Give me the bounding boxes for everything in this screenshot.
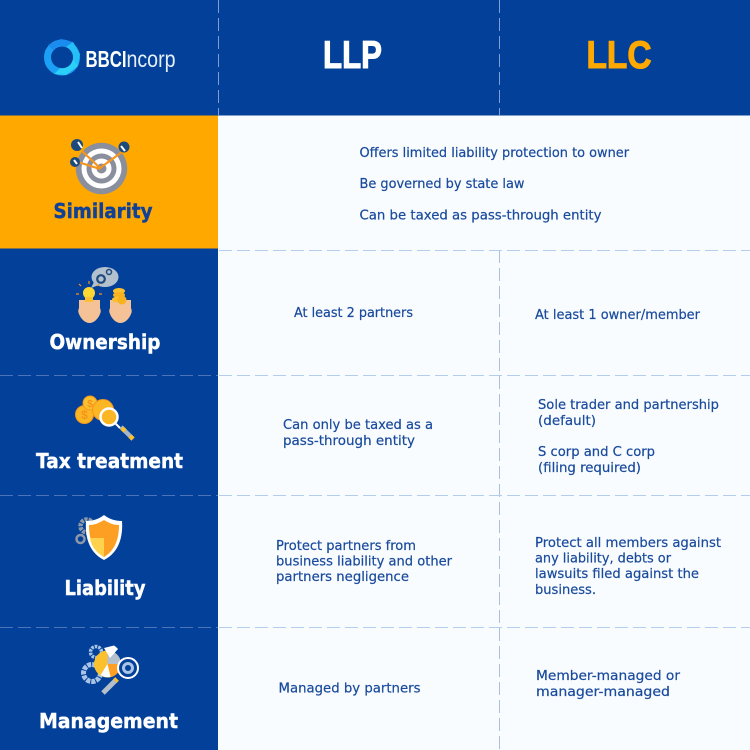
LLP ownership: At least 2 partners [294, 306, 413, 321]
LLP liability: business liability and other [276, 554, 453, 570]
LLC tax treatment [538, 398, 719, 476]
LLC tax treatment: (filing required) [538, 461, 641, 476]
similarity text [360, 146, 630, 224]
LLC management [536, 669, 681, 700]
column heading: LLP: LLP [323, 34, 382, 77]
logo: BBCIncorp: ncorp [126, 46, 176, 72]
similarity text: Offers limited liability protection to owner [360, 146, 630, 161]
LLC ownership: At least 1 owner/member [535, 308, 701, 323]
LLP tax treatment: pass-through entity [283, 434, 415, 449]
LLC tax treatment: (default) [538, 414, 596, 429]
LLP liability: Protect partners from [276, 539, 416, 554]
icon: two heads with idea and coins [76, 267, 132, 323]
logo: BBCIncorp [45, 39, 176, 75]
LLC liability: lawsuits filed against the [535, 567, 699, 582]
similarity panel background [0, 116, 218, 248]
label: Management: Management [39, 709, 178, 733]
label: Similarity: Similarity [54, 199, 152, 223]
LLC management: Member-managed or [536, 669, 681, 684]
LLC tax treatment: S corp and C corp [538, 445, 655, 460]
icon: target with darts [70, 139, 130, 194]
LLC liability: business. [535, 583, 596, 598]
LLP liability: partners negligence [276, 570, 409, 585]
LLP liability [276, 539, 453, 585]
label: Ownership: Ownership [50, 330, 160, 354]
icon: coins under magnifier: $ [87, 399, 93, 410]
LLP management: Managed by partners [278, 682, 421, 696]
LLC tax treatment: Sole trader and partnership [538, 398, 719, 413]
column heading: LLC: LLC [586, 34, 652, 77]
label: Liability: Liability [64, 576, 146, 600]
LLC liability: any liability, debts or [535, 552, 672, 566]
label: Tax treatment: Tax treatment [36, 449, 183, 473]
header band [0, 0, 750, 116]
icon: shield with gears [76, 515, 122, 560]
similarity text: Can be taxed as pass-through entity [360, 208, 602, 224]
LLP tax treatment: Can only be taxed as a [283, 418, 433, 433]
icon: coins under magnifier [76, 396, 133, 439]
similarity text: Be governed by state law [360, 177, 525, 192]
LLP tax treatment [283, 418, 433, 449]
LLC liability: Protect all members against [535, 536, 721, 551]
icon: pie chart with gears and pencil [84, 646, 138, 693]
icon: coins under magnifier: $ [81, 408, 88, 422]
left label column [0, 248, 218, 750]
logo: BBCIncorp: BBCI [86, 46, 126, 72]
LLC management: manager-managed [536, 685, 670, 700]
LLC liability [535, 536, 721, 598]
